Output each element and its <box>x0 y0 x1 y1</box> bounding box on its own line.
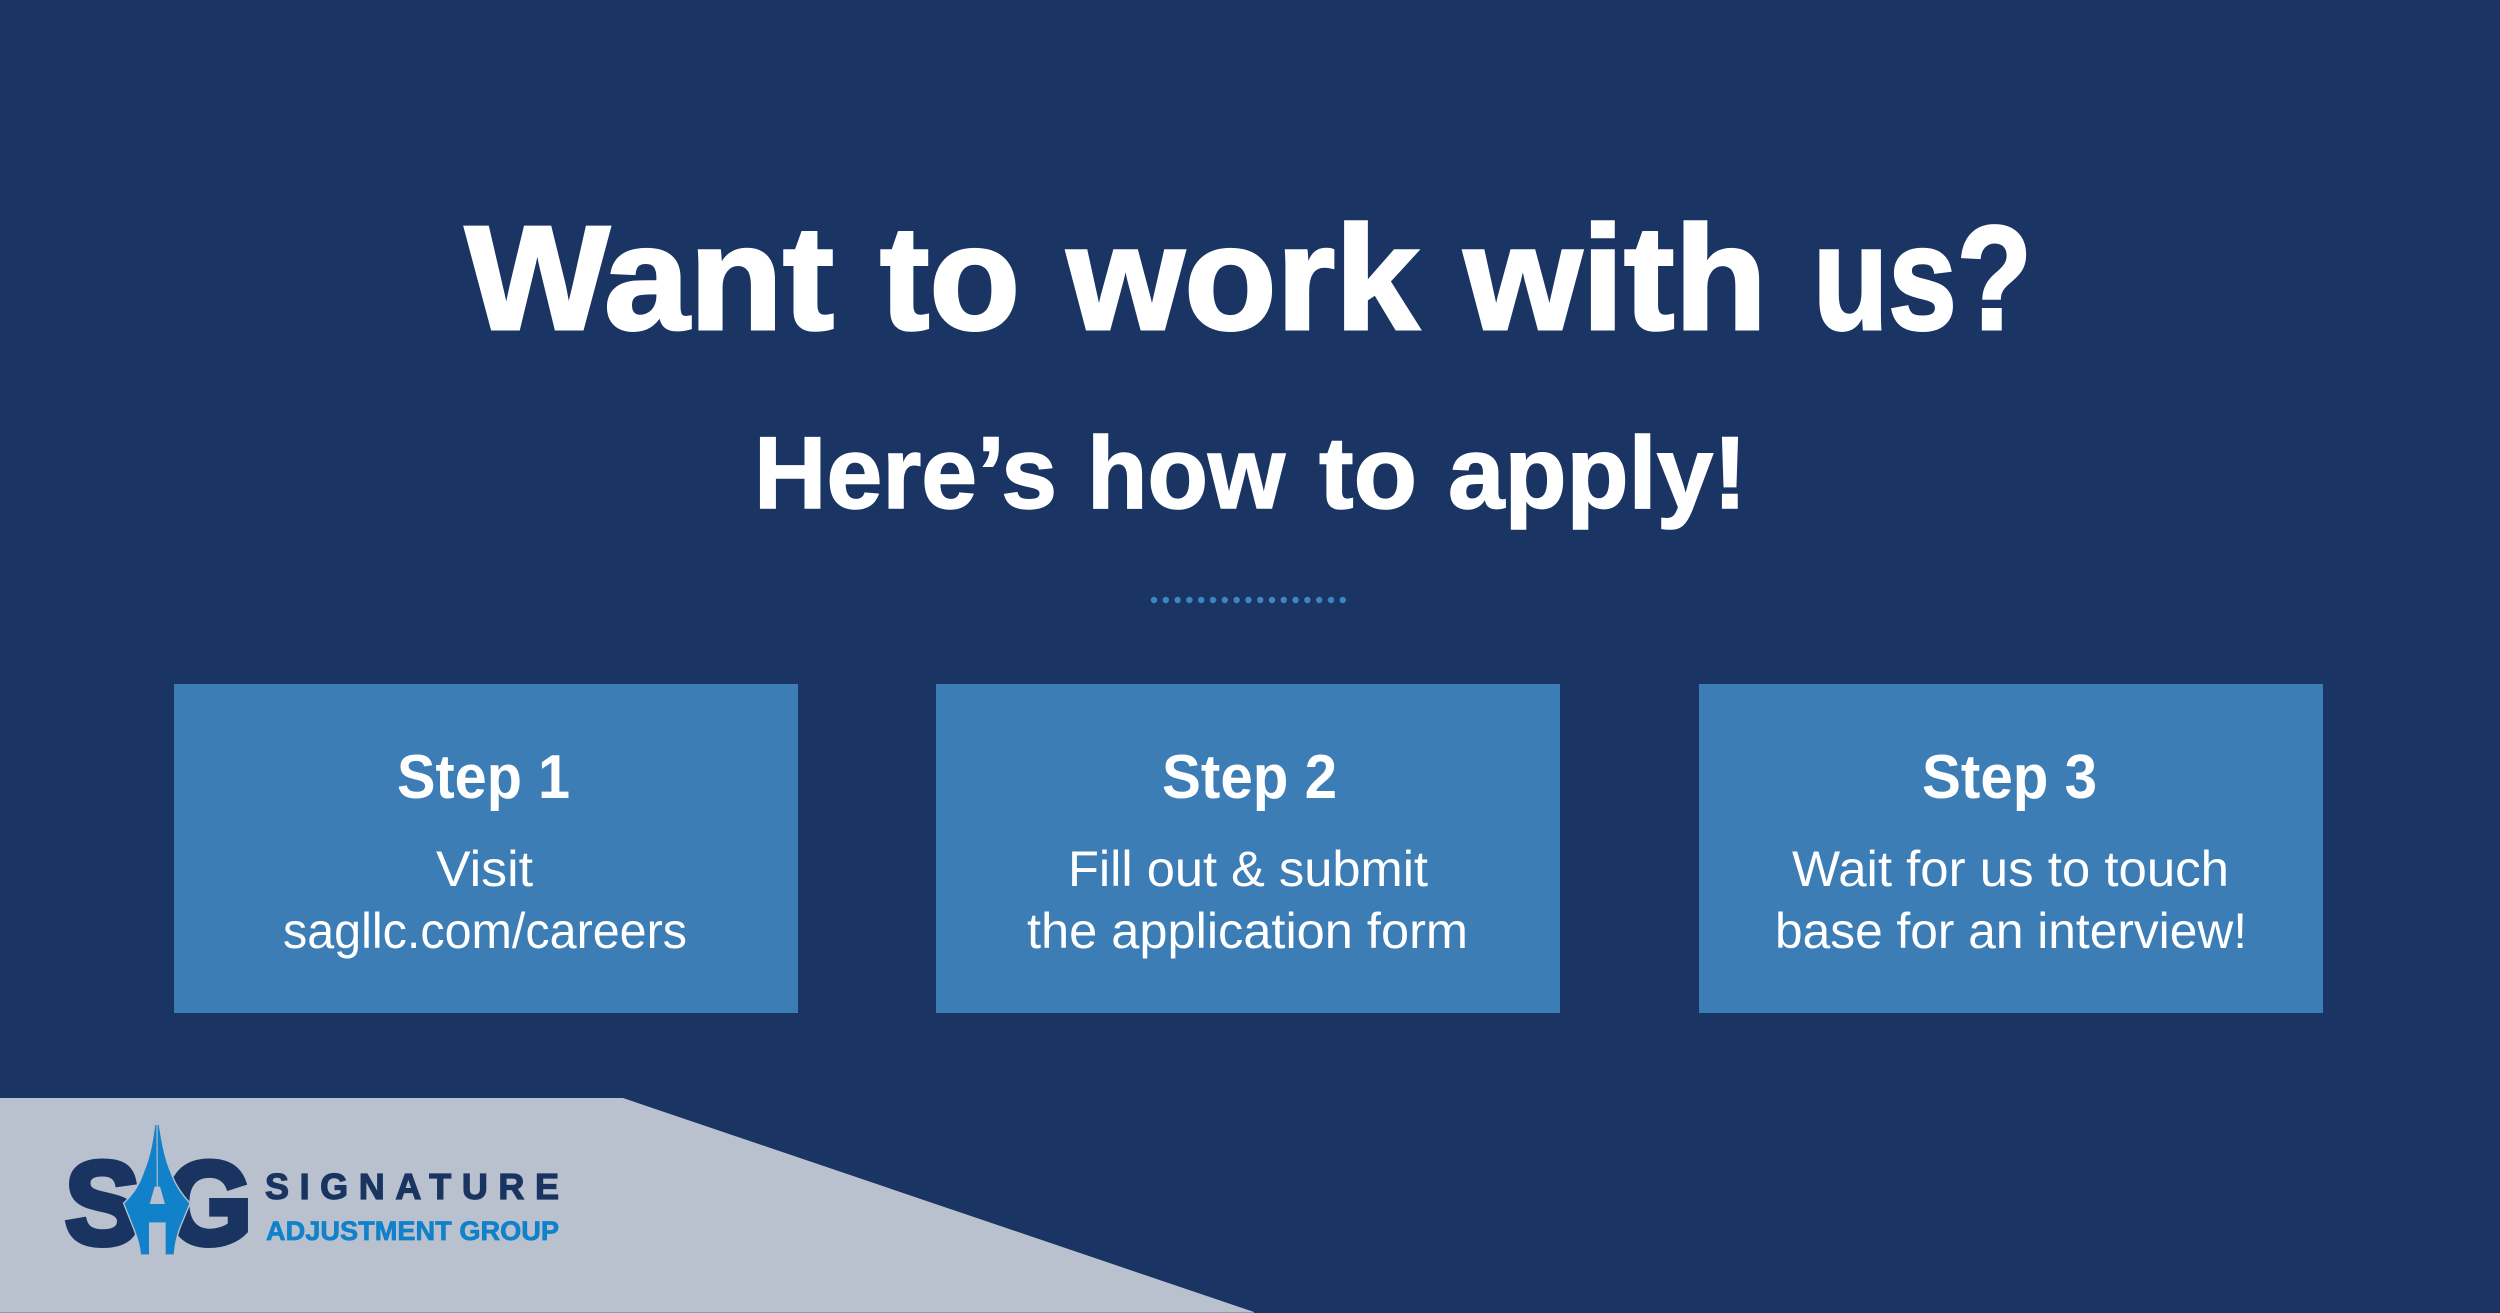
logo monogram <box>65 1125 252 1270</box>
step 1 description: Visit <box>436 841 533 897</box>
subtitle: Here’s <box>754 416 1057 530</box>
step 1 description <box>283 841 687 959</box>
panel: step 2 <box>936 684 1560 1013</box>
footer light grey corner panel <box>0 1098 1254 1312</box>
step 2 heading: Step 2 <box>1162 743 1337 812</box>
logo monogram: S <box>65 1138 140 1270</box>
logo wordmark: adjustment group: ADJUSTMENT GROUP <box>266 1216 559 1246</box>
step 2 description: the application form <box>1027 903 1468 959</box>
nib slit <box>155 1125 159 1187</box>
title: work <box>1066 196 1420 361</box>
dotted divider <box>1151 597 1346 603</box>
step 1 description: sagllc.com/careers <box>283 903 687 959</box>
title: with <box>1463 196 1767 361</box>
title: Want <box>465 196 834 361</box>
step 3 description: Wait for us to touch <box>1792 841 2229 897</box>
panel: step 3 <box>1699 684 2323 1013</box>
step 2 description <box>1027 841 1468 959</box>
step 3 heading: Step 3 <box>1922 743 2097 812</box>
subtitle <box>754 416 1747 530</box>
logo wordmark: signature: SIGNATURE <box>265 1166 559 1207</box>
subtitle: how <box>1087 416 1286 530</box>
subtitle: to <box>1319 416 1417 530</box>
step 3 description <box>1775 841 2247 959</box>
logo <box>65 1125 559 1270</box>
logo monogram: G <box>166 1138 252 1270</box>
subtitle: apply! <box>1448 416 1747 530</box>
title: us? <box>1813 196 2032 361</box>
icon: pen nib <box>124 1125 189 1254</box>
step 2 description: Fill out & submit <box>1068 841 1428 897</box>
step 1 heading: Step 1 <box>397 743 570 812</box>
title: to <box>880 196 1020 361</box>
title <box>465 196 2032 361</box>
step 3 description: base for an interview! <box>1775 903 2247 959</box>
panel: step 1 <box>174 684 798 1013</box>
